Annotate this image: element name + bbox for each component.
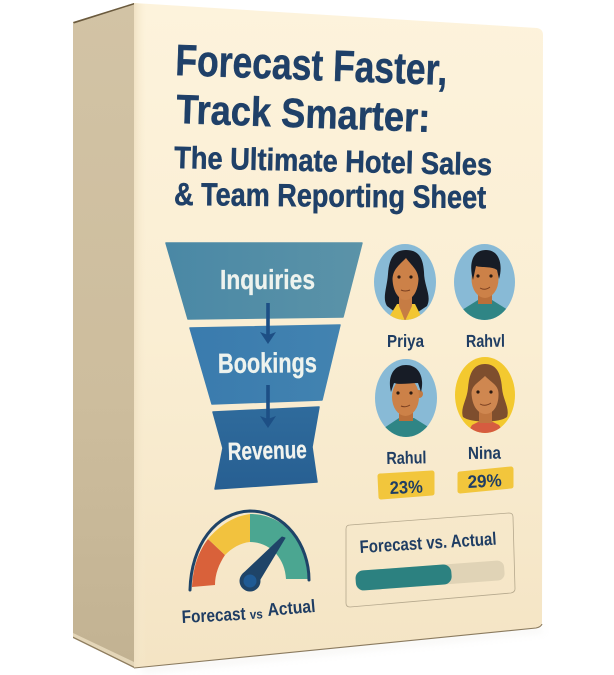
funnel stage: Revenue: Revenue	[227, 436, 307, 466]
title: The Ultimate Hotel Sales	[174, 140, 493, 182]
avatar: Rahvl: Rahvl	[466, 331, 505, 351]
box front face	[134, 3, 543, 668]
funnel stage: Bookings: Bookings	[218, 347, 317, 379]
avatar: Priya: Priya	[387, 331, 424, 351]
gauge label: Forecast	[181, 604, 246, 627]
badge: 29%: 29%	[467, 470, 502, 492]
product box infographic	[73, 3, 543, 668]
title: & Team Reporting Sheet	[174, 176, 487, 215]
panel: forecast vs actual	[346, 513, 515, 607]
team avatars	[374, 244, 515, 498]
funnel stage: Bookings	[190, 325, 340, 404]
title	[174, 36, 493, 215]
gauge label: Actual	[267, 596, 316, 620]
gauge segment: teal	[250, 514, 308, 579]
gauge segment: red	[192, 539, 225, 587]
funnel stage: Inquiries	[166, 243, 362, 319]
progress bar	[355, 560, 505, 591]
avatar: Nina: Nina	[468, 443, 501, 463]
title: Track Smarter:	[176, 86, 431, 141]
gauge segment: yellow	[208, 514, 250, 555]
box spine	[73, 3, 134, 668]
avatar: Rahvl	[454, 244, 515, 351]
avatar: Rahul: Rahul	[386, 447, 427, 468]
gauge label	[181, 596, 316, 627]
arrow: inquiries to bookings	[260, 303, 276, 344]
badge: 23%	[380, 473, 432, 498]
arrow: bookings to revenue	[260, 385, 276, 428]
avatar: Priya	[374, 244, 436, 351]
title: Forecast Faster,	[175, 36, 448, 95]
gauge needle	[240, 537, 285, 592]
badge: 29%	[460, 469, 511, 492]
panel heading: Forecast vs. Actual	[359, 529, 497, 557]
gauge label: vs	[249, 606, 263, 622]
gauge outer arc	[190, 511, 309, 590]
funnel stage: Inquiries: Inquiries	[220, 264, 315, 295]
avatar: Nina	[455, 357, 515, 463]
funnel	[166, 243, 362, 489]
avatar: Rahul	[375, 359, 437, 468]
funnel stage: Revenue	[213, 407, 319, 489]
gauge	[181, 511, 316, 627]
badge: 23%: 23%	[389, 477, 423, 498]
box shadow	[140, 628, 544, 672]
